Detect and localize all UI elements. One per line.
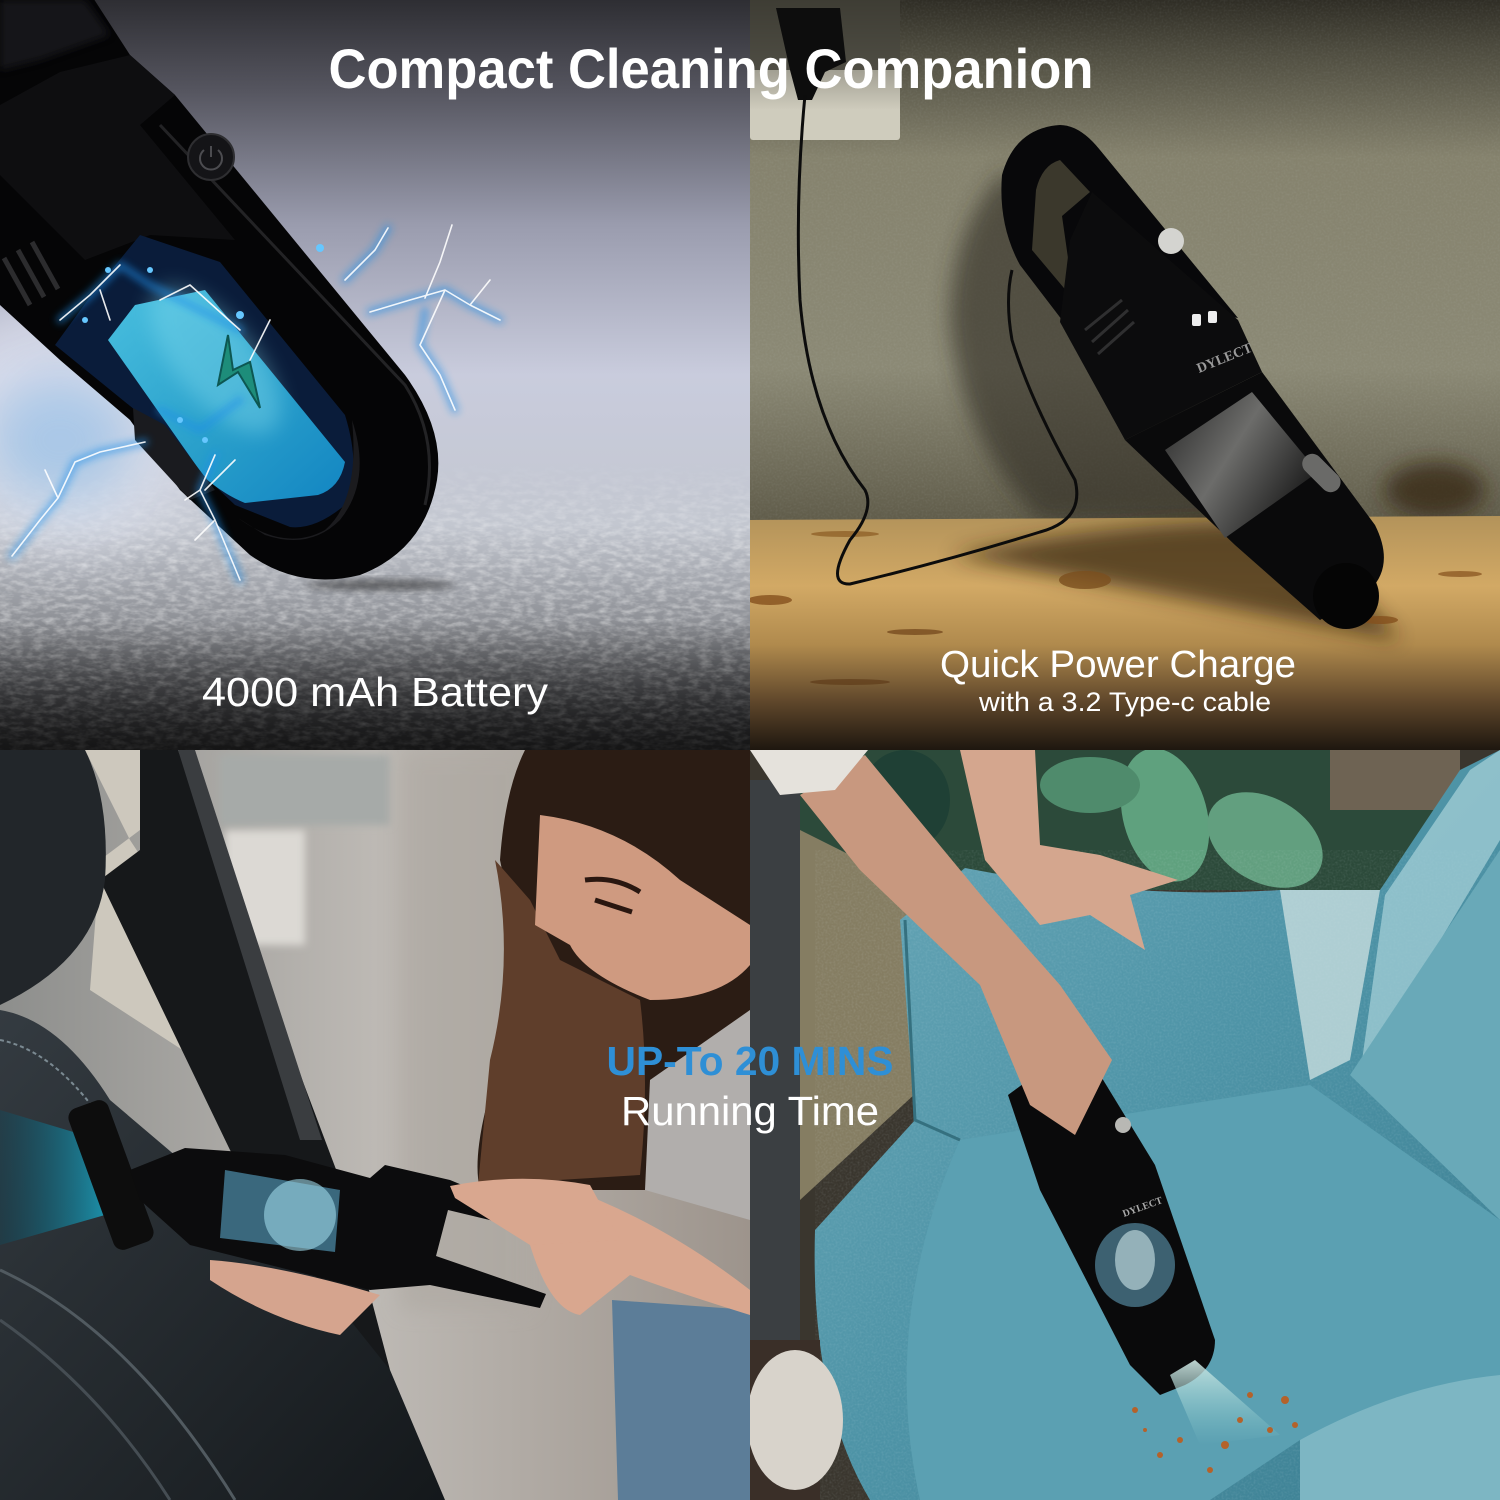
carpet floor texture [0, 290, 750, 750]
text: Running Time: Running Time [621, 1088, 879, 1134]
icon: vacuum handle with battery window [0, 0, 438, 580]
car seat [0, 750, 445, 1500]
wall socket and charger [750, 0, 900, 140]
window [55, 235, 354, 527]
panel: sofa cleaning [747, 738, 1500, 1500]
panel: battery [0, 0, 750, 750]
car door frame [85, 750, 390, 1370]
arm [530, 1200, 750, 1315]
text: UP-To 20 MINS: UP-To 20 MINS [606, 1038, 894, 1084]
nozzle [1322, 582, 1379, 629]
wooden table [748, 516, 1500, 750]
second arm and hand [960, 750, 1178, 950]
blue glow [0, 380, 130, 500]
wall shadow [938, 166, 1206, 518]
arm holding vacuum [800, 755, 1112, 1135]
handle loop [1001, 125, 1238, 318]
text: 4000 mAh Battery: 4000 mAh Battery [202, 669, 549, 715]
panel: quick charge [748, 0, 1500, 750]
lightning effects [12, 225, 500, 580]
air stream [0, 1110, 105, 1245]
cup section [1125, 372, 1384, 620]
battery cell [108, 290, 345, 503]
icon: handheld vacuum [1001, 125, 1384, 629]
floor and slippers [747, 780, 843, 1500]
fingers over handle [450, 1179, 620, 1245]
handle rim [238, 420, 360, 540]
icon: power button [188, 134, 234, 180]
suction spray and debris [1132, 1360, 1298, 1473]
icon: lightning bolt [218, 335, 260, 408]
text: with a 3.2 Type-c cable: with a 3.2 Type-c cable [978, 687, 1271, 717]
panel: car cleaning [0, 750, 750, 1500]
woman [478, 750, 750, 1500]
plants [800, 738, 1460, 1200]
icon: vacuum on sofa [1008, 1042, 1215, 1395]
title: Compact Cleaning Companion [328, 37, 1094, 100]
icon: handheld vacuum: DYLECT [1195, 341, 1255, 377]
grip under window [133, 408, 215, 500]
sofa [815, 750, 1500, 1500]
charging cable [798, 95, 1077, 584]
vents [4, 242, 58, 305]
icon: vacuum on sofa: DYLECT [1121, 1195, 1164, 1220]
icon: vacuum in car [66, 1097, 552, 1335]
sleeve [750, 750, 868, 795]
text: Quick Power Charge: Quick Power Charge [940, 644, 1296, 686]
